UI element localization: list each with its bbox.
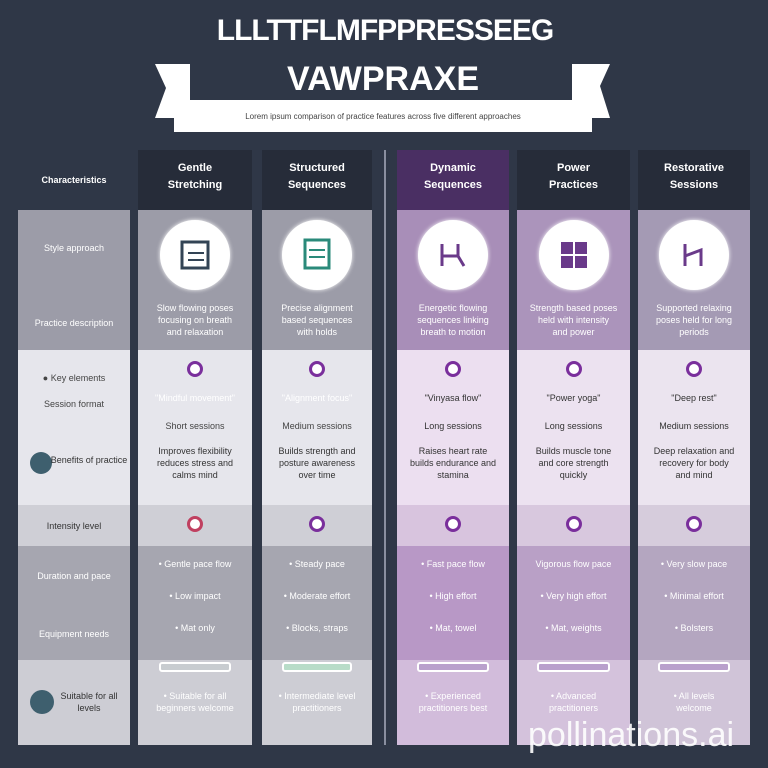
column 3: Sequences [424,179,482,191]
column 2: over time [298,470,336,480]
column 4: • Mat, weights [545,623,602,633]
column 5: Deep relaxation and [654,446,734,456]
column 3: stamina [437,470,469,480]
label column: Practice description [35,318,113,328]
column 5: • Minimal effort [664,591,724,601]
column 2: • Blocks, straps [286,623,348,633]
column 1: calms mind [172,470,218,480]
column 1: beginners welcome [156,703,234,713]
column 4: "Power yoga" [547,393,600,403]
label column: Benefits of practice [51,455,127,465]
column 2: • Intermediate level [279,691,355,701]
label column: Suitable for all levels [60,691,118,713]
column 1: Stretching [168,179,222,191]
column 3: builds endurance and [410,458,496,468]
column 5: • Very slow pace [661,559,727,569]
column 3: "Vinyasa flow" [425,393,481,403]
column 4: and power [552,327,595,337]
column 5: "Deep rest" [671,393,717,403]
column 5: periods [679,327,709,337]
column 5: recovery for body [659,458,729,468]
column 4: Long sessions [545,421,602,431]
column 2: Builds strength and [278,446,356,456]
column 3: • Fast pace flow [421,559,485,569]
column 1: and relaxation [167,327,223,337]
title: LLLTTFLMFPPRESSEEG [217,14,553,47]
column 1: reduces stress and [157,458,233,468]
column 3: • Mat, towel [430,623,476,633]
column 4: Builds muscle tone [536,446,611,456]
column 1: • Suitable for all [164,691,226,701]
column 5 [638,150,750,745]
label column: Intensity level [47,521,101,531]
icon: grid [538,220,608,290]
column 2: based sequences [282,315,352,325]
label column: ● Key elements [43,373,105,383]
label column: Style approach [44,243,104,253]
icon: label circle [30,452,52,474]
icon: scroll [160,220,230,290]
column 1: focusing on breath [158,315,232,325]
column 1: Short sessions [165,421,225,431]
column 4: Power [557,162,590,174]
subtitle: Lorem ipsum comparison of practice features across five different approaches [245,112,521,121]
icon: poses [418,220,488,290]
column 2: with holds [297,327,337,337]
column 1: Gentle [178,162,212,174]
column 2 [262,150,372,745]
label column: Duration and pace [37,571,111,581]
banner heading: VAWPRAXE [287,60,479,98]
column 5: • Bolsters [675,623,713,633]
column 2: Structured [289,162,345,174]
column 2: Precise alignment [281,303,353,313]
column 2: • Moderate effort [284,591,350,601]
column 4 [517,150,630,745]
column 3: • Experienced [425,691,481,701]
column 3: • High effort [429,591,476,601]
column 2: • Steady pace [289,559,345,569]
label column: Characteristics [41,175,107,185]
column 4: Vigorous flow pace [536,559,611,569]
column 3 [397,150,509,745]
column 3: Dynamic [430,162,476,174]
label column: Session format [44,399,104,409]
column 1 [138,150,252,745]
column 5: Supported relaxing [656,303,732,313]
column 4: held with intensity [538,315,609,325]
column 5: poses held for long [656,315,732,325]
column 1: "Mindful movement" [155,393,235,403]
column 5: Sessions [670,179,718,191]
column 2: Sequences [288,179,346,191]
column 5: Medium sessions [659,421,729,431]
column 3: practitioners best [419,703,487,713]
column 2: Medium sessions [282,421,352,431]
watermark: pollinations.ai [528,716,734,754]
column 4: quickly [560,470,587,480]
column 2: posture awareness [279,458,355,468]
column 3: Long sessions [424,421,482,431]
column 4: Strength based poses [530,303,617,313]
column 2: "Alignment focus" [282,393,352,403]
label column: Equipment needs [39,629,109,639]
column 1: Improves flexibility [158,446,232,456]
column 3: sequences linking [417,315,489,325]
divider [384,150,386,745]
column 5: and mind [675,470,713,480]
column 5: welcome [676,703,712,713]
column 3: breath to motion [420,327,486,337]
column 4: • Advanced [551,691,596,701]
column 4: and core strength [538,458,609,468]
icon: book [282,220,352,290]
column 1: • Gentle pace flow [159,559,231,569]
column 4: practitioners [549,703,598,713]
column 4: • Very high effort [540,591,607,601]
label column [18,175,130,745]
column 1: • Low impact [169,591,221,601]
column 3: Raises heart rate [419,446,487,456]
icon: pose [659,220,729,290]
column 5: • All levels [674,691,714,701]
column 3: Energetic flowing [419,303,487,313]
banner ribbon [155,60,610,132]
column 2: practitioners [292,703,342,713]
column 1: Slow flowing poses [157,303,233,313]
column 4: Practices [549,179,598,191]
column 5: Restorative [664,162,724,174]
column 1: • Mat only [175,623,215,633]
